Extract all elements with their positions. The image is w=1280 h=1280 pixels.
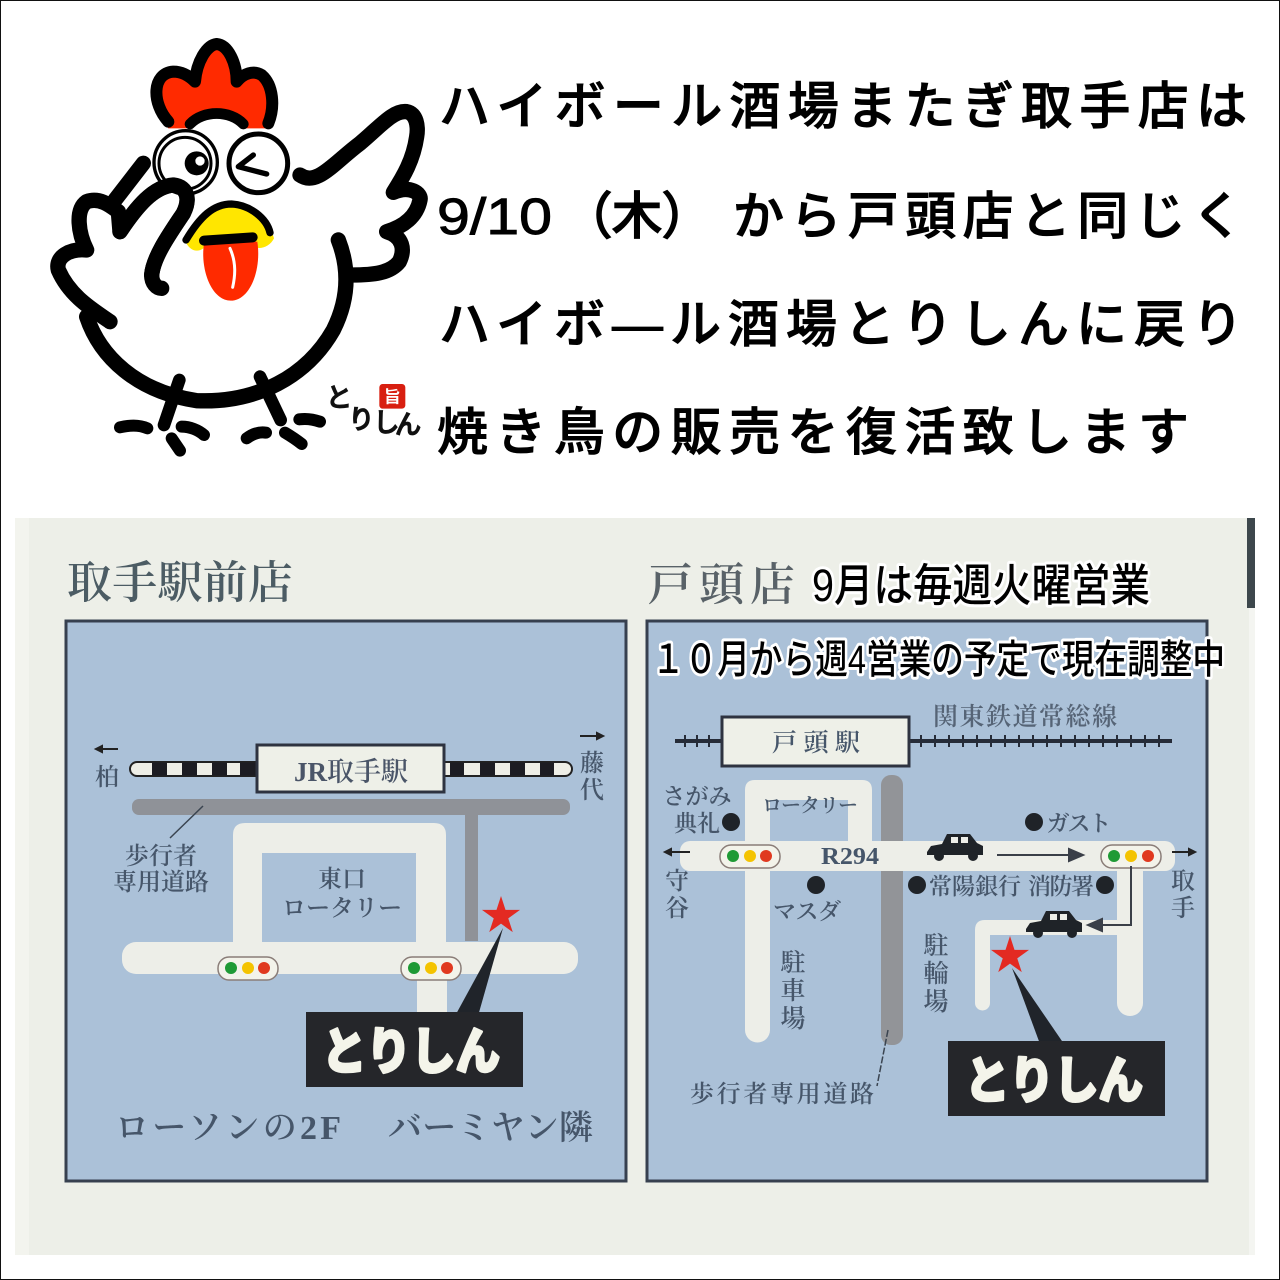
icon: car	[1026, 911, 1082, 938]
landmark: Sagami Tenrei: 典礼	[674, 811, 720, 836]
heading: Toride station store: 取手駅前店	[67, 558, 293, 608]
label: bicycle parking: 駐	[922, 932, 949, 960]
hand at eye	[58, 185, 187, 322]
landmark: Mazda	[773, 876, 841, 924]
label: east exit rotary: 東口	[318, 866, 366, 893]
panel: Toride map	[66, 621, 626, 1181]
landmark: Sagami Tenrei: さがみ	[662, 784, 732, 809]
body outline	[87, 240, 346, 401]
headline line 2: （木）	[562, 188, 712, 245]
label: Moriya: 谷	[665, 895, 689, 922]
traffic signal	[720, 845, 780, 868]
landmark: Joyo Bank: 常陽銀行	[929, 874, 1021, 899]
station box: JR Toride: JR取手駅	[294, 757, 408, 787]
white roads	[122, 823, 578, 1015]
label: bicycle parking: 輪	[923, 960, 949, 988]
label: bicycle parking: 場	[923, 988, 949, 1016]
winking right eye	[229, 134, 288, 193]
arrow along R294	[997, 849, 1083, 861]
store sign: Torishin: とりしん	[965, 1053, 1143, 1109]
landmark: Gusto: ガスト	[1046, 811, 1112, 836]
railway track	[675, 735, 1172, 747]
station box: Togashira	[722, 717, 909, 766]
mouth line	[204, 237, 253, 241]
label: R294: R294	[821, 844, 879, 870]
pedestrian road	[881, 775, 903, 1045]
label: Kanto Railway Joso Line: 関東鉄道常総線	[933, 703, 1117, 731]
signature: とりしん	[326, 383, 421, 439]
headline line 4: 焼き鳥の販売を復活致します	[437, 404, 1189, 461]
label: Toride	[1171, 868, 1195, 922]
icon: car	[927, 834, 983, 861]
label: Moriya: 守	[665, 868, 689, 895]
icon: red star	[482, 896, 520, 932]
store sign: Torishin	[948, 1041, 1165, 1116]
notice: September hours: 9月は毎週火曜営業	[812, 560, 1150, 611]
legs and feet	[120, 377, 320, 451]
redraw hand over eye	[120, 185, 187, 275]
seal stamp: 旨	[384, 388, 401, 407]
tongue	[203, 242, 258, 301]
comb	[156, 44, 272, 130]
label: pedestrian road: 歩行者専用道路	[690, 1081, 874, 1108]
beak	[185, 204, 274, 251]
address note: ローソンの2F	[115, 1110, 341, 1147]
arrowhead	[1088, 919, 1102, 931]
route arrow	[1088, 866, 1131, 931]
label: pedestrian road: 専用道路	[113, 869, 209, 896]
landmark: Sagami Tenrei	[662, 784, 740, 836]
station box: JR Toride	[257, 745, 444, 792]
heading: Togashira store: 戸頭店	[648, 560, 795, 610]
station box: Togashira: 戸頭駅	[772, 729, 860, 757]
pedestrian road leader	[170, 806, 203, 838]
finger stroke	[115, 163, 143, 200]
label: parking lot: 車	[780, 977, 806, 1005]
headline line 2: から戸頭店と同じく	[733, 188, 1243, 245]
headline line 2: 9/10	[437, 188, 552, 245]
pedestrian road	[132, 799, 570, 941]
label: Kashiwa: 柏	[95, 764, 119, 791]
label: Toride: 取	[1171, 868, 1195, 895]
arrow to Moriya	[665, 849, 690, 855]
raised wing	[300, 112, 420, 275]
arrow to Toride	[1172, 849, 1195, 855]
label: rotary: ロータリー	[762, 795, 858, 817]
label: east exit rotary: ロータリー	[282, 896, 402, 922]
landmark: fire station: 消防署	[1028, 874, 1094, 899]
address note	[115, 1109, 593, 1147]
headline line 3: ハイボ―ル酒場とりしんに戻り	[439, 296, 1243, 353]
label: parking lot	[779, 949, 806, 1033]
label: Toride: 手	[1171, 895, 1195, 922]
icon: red star	[991, 936, 1029, 972]
label: pedestrian road: 歩行者	[125, 843, 197, 870]
panel: Togashira map	[647, 621, 1207, 1181]
address note: バーミヤン隣	[388, 1109, 593, 1147]
label: Fujishiro	[580, 750, 604, 804]
store sign: Torishin: とりしん	[322, 1024, 500, 1080]
traffic signal	[218, 957, 278, 980]
headline line 1: ハイボール酒場またぎ取手店は	[439, 78, 1247, 135]
label: pedestrian road	[113, 843, 209, 896]
label: Moriya	[665, 868, 689, 922]
headline text block	[437, 78, 1247, 461]
railway track	[130, 762, 572, 776]
landmark: Mazda: マスダ	[773, 899, 841, 924]
label: Fujishiro: 藤	[580, 750, 604, 777]
store sign: Torishin	[306, 1012, 523, 1087]
arrow to Fujishiro	[580, 733, 603, 739]
label: Fujishiro: 代	[580, 777, 604, 804]
label: parking lot: 場	[780, 1005, 806, 1033]
headline line 2	[437, 188, 1243, 245]
icon: rooster mascot	[58, 44, 421, 451]
label: parking lot: 駐	[779, 949, 806, 977]
traffic signal	[1101, 845, 1161, 868]
pedestrian road leader	[877, 1030, 888, 1086]
pointer	[455, 928, 503, 1016]
white roads	[680, 780, 1175, 1042]
label: east exit rotary	[282, 866, 402, 922]
seal stamp	[379, 384, 405, 409]
panel: map card	[15, 518, 1255, 1255]
left eye	[154, 131, 217, 194]
arrow to Kashiwa	[96, 746, 118, 752]
traffic signal	[401, 957, 461, 980]
label: bicycle parking	[922, 932, 949, 1016]
pointer	[1012, 968, 1064, 1044]
